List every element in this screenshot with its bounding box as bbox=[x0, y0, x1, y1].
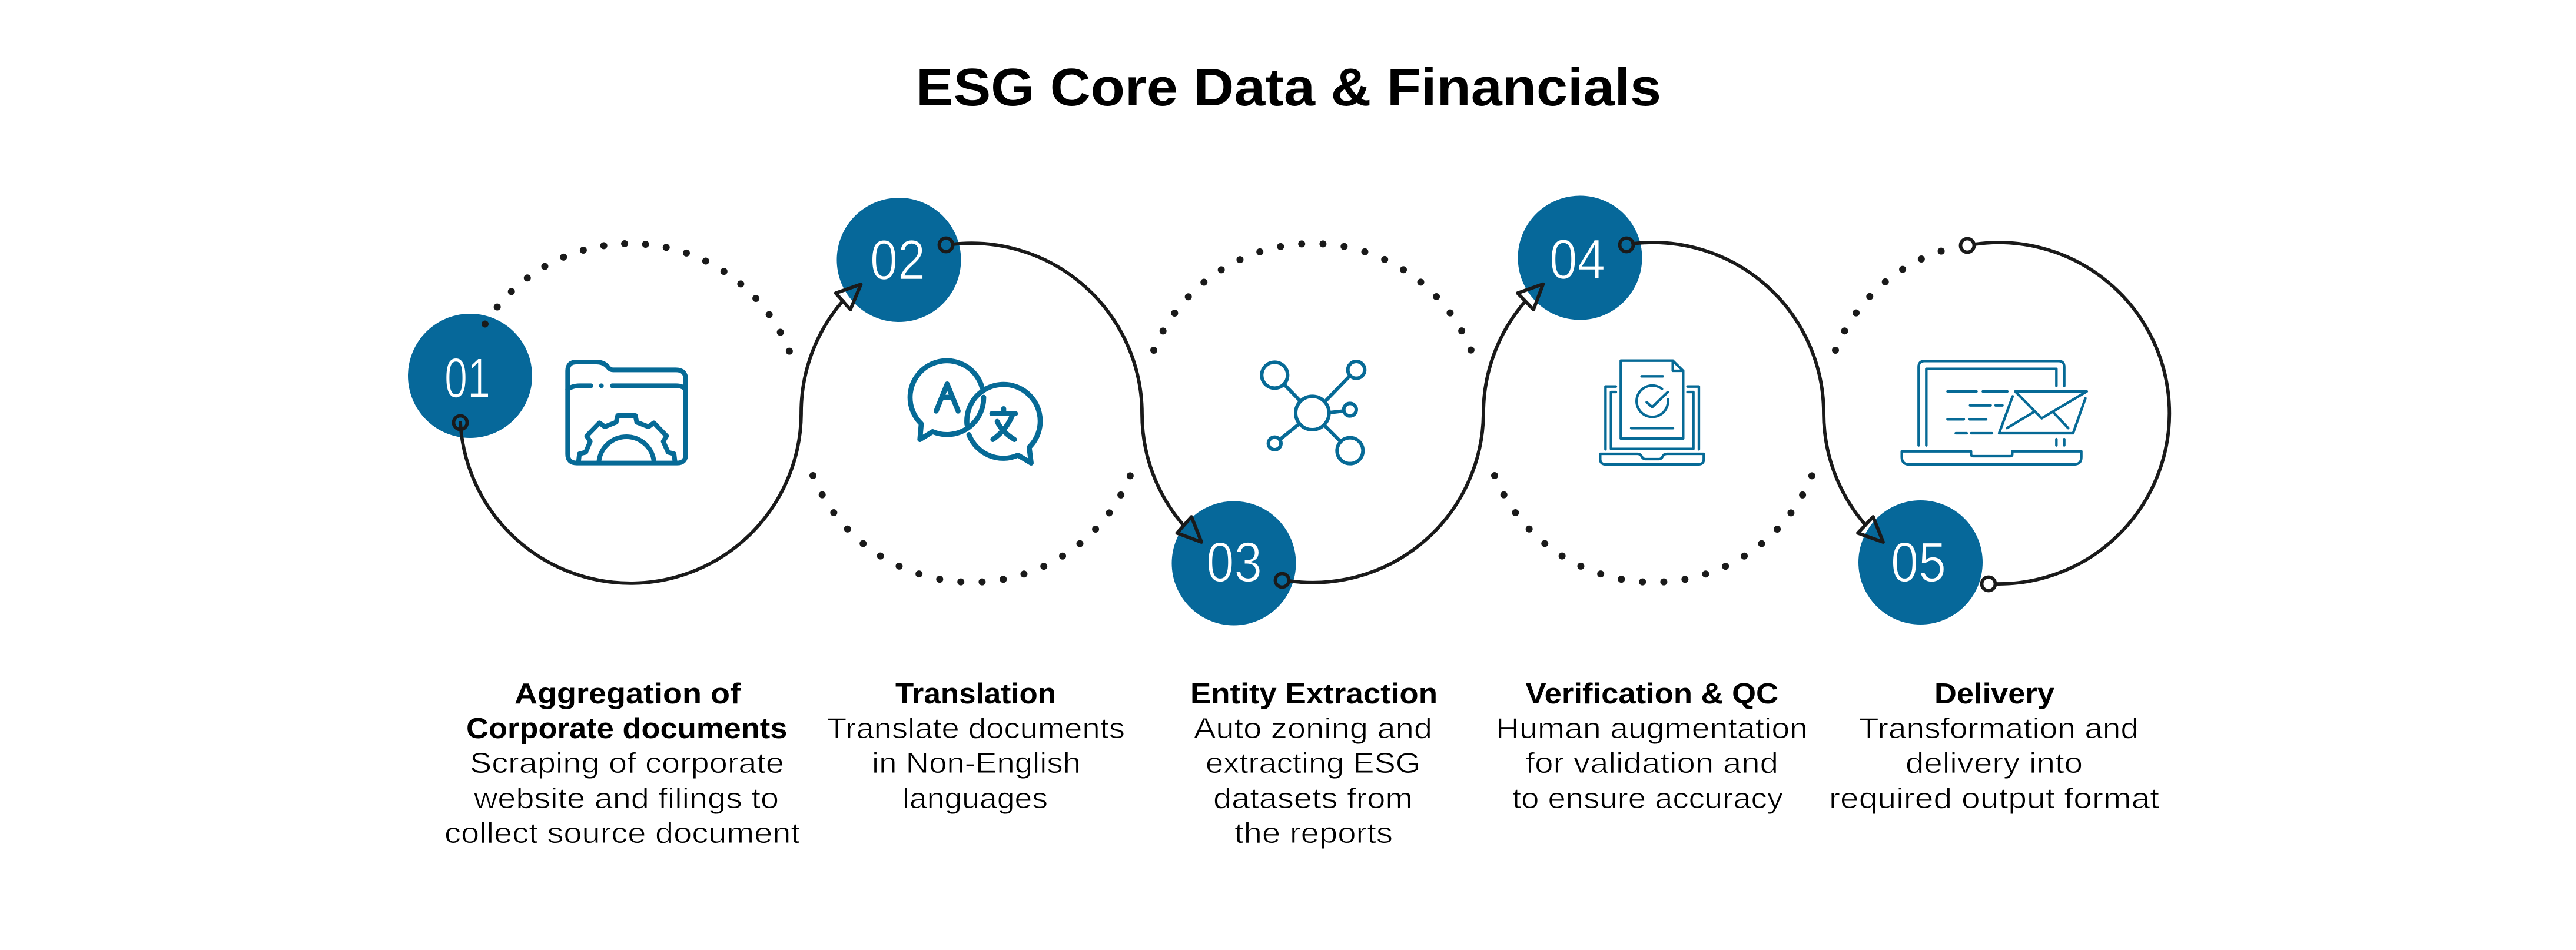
icon: folder with gear bbox=[567, 362, 686, 463]
caption: step 3: Entity Extraction bbox=[1190, 678, 1438, 710]
caption: step 3: datasets from bbox=[1213, 783, 1413, 815]
badge 05 bbox=[1858, 500, 1983, 625]
caption: step 2: in Non-English bbox=[872, 748, 1081, 779]
caption: step 1 bbox=[444, 678, 800, 849]
caption: step 2 bbox=[827, 678, 1125, 815]
dotted arc: step 5 top bbox=[1835, 251, 1941, 350]
dotted arc: step 2 bottom bbox=[813, 476, 1130, 582]
icon: translation bubbles bbox=[910, 361, 1040, 463]
caption: step 3: extracting ESG bbox=[1206, 748, 1420, 779]
badge 03: 03 bbox=[1206, 531, 1262, 594]
caption: step 4 bbox=[1496, 678, 1808, 815]
icon: entity network bbox=[1262, 361, 1365, 464]
caption: step 4: for validation and bbox=[1526, 748, 1778, 779]
arrow: 02 to 03 bbox=[940, 238, 1201, 542]
icon: laptop with envelope bbox=[1902, 361, 2087, 464]
badge 04 bbox=[1518, 195, 1642, 320]
icon: laptop with verified document bbox=[1600, 361, 1704, 464]
caption: step 2: Translation bbox=[895, 678, 1056, 710]
caption: step 4: to ensure accuracy bbox=[1512, 783, 1784, 815]
badge 04: 04 bbox=[1549, 228, 1605, 291]
dotted arc: step 3 top bbox=[1154, 244, 1471, 350]
arrow: 04 to 05 bbox=[1620, 238, 1883, 542]
badge 03 bbox=[1171, 501, 1296, 625]
caption: step 1: Aggregation of bbox=[514, 678, 741, 710]
caption: step 1: Scraping of corporate bbox=[470, 748, 784, 779]
caption: step 5: Transformation and bbox=[1859, 713, 2139, 745]
arrow: 03 to 04 bbox=[1275, 284, 1543, 587]
caption: step 1: website and filings to bbox=[473, 783, 779, 815]
caption: step 4: Verification & QC bbox=[1526, 678, 1778, 710]
badge 01 bbox=[408, 314, 532, 438]
title: ESG Core Data & Financials bbox=[916, 58, 1661, 117]
dotted arc: step 1 top bbox=[485, 244, 789, 351]
arrow: 01 to 02 bbox=[453, 284, 861, 583]
caption: step 3 bbox=[1190, 678, 1438, 849]
badge 05: 05 bbox=[1891, 531, 1946, 594]
caption: step 3: the reports bbox=[1234, 818, 1393, 849]
caption: step 5: required output format bbox=[1829, 783, 2159, 815]
caption: step 1: collect source document bbox=[444, 818, 800, 849]
caption: step 5: delivery into bbox=[1906, 748, 2083, 779]
caption: step 5: Delivery bbox=[1934, 678, 2054, 710]
caption: step 2: languages bbox=[902, 783, 1048, 815]
caption: step 4: Human augmentation bbox=[1496, 713, 1808, 745]
arrow: 05 loop bbox=[1960, 239, 2169, 591]
badge 01: 01 bbox=[444, 347, 490, 410]
badge 02 bbox=[837, 198, 961, 322]
caption: step 5 bbox=[1829, 678, 2159, 815]
dotted arc: step 4 bottom bbox=[1495, 476, 1812, 582]
caption: step 2: Translate documents bbox=[827, 713, 1125, 745]
caption: step 3: Auto zoning and bbox=[1194, 713, 1432, 745]
caption: step 1: Corporate documents bbox=[466, 713, 788, 745]
badge 02: 02 bbox=[870, 228, 925, 292]
